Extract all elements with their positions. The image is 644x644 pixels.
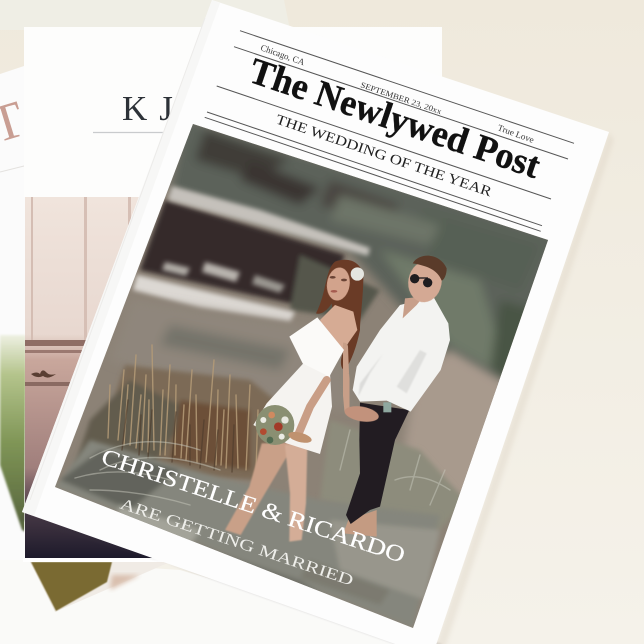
photo names text [102, 450, 404, 584]
foliage band [170, 118, 560, 395]
man head [408, 264, 442, 302]
bouquet [256, 405, 294, 445]
woman [225, 260, 364, 542]
woman legs [225, 443, 307, 542]
man feet [343, 510, 377, 537]
couple [225, 256, 450, 542]
newspaper title: The Newlywed Post [244, 51, 546, 187]
white dress top [289, 317, 344, 377]
panel: far-left magazine [0, 64, 60, 644]
headline: THE WEDDING OF THE YEAR [274, 113, 494, 201]
man neck and chest [402, 298, 420, 318]
woman arm to hands [344, 347, 348, 410]
woman hair [316, 260, 363, 371]
ornament [31, 370, 56, 378]
panel: top-left backdrop [0, 0, 290, 74]
panel: middle magazine [23, 27, 442, 562]
shadow under main book [20, 512, 442, 644]
masthead date: SEPTEMBER 23, 20xx [359, 80, 443, 116]
watch [383, 402, 391, 412]
cover photo [40, 110, 560, 640]
sunglasses [410, 274, 432, 287]
white dress skirt [253, 363, 332, 454]
foreground grass mass [70, 365, 465, 530]
sand midground [163, 298, 502, 498]
panel: bottom page [0, 560, 432, 644]
woman shoulders [320, 305, 357, 350]
far-left magazine photo [0, 335, 26, 532]
photo names text: CHRISTELLE & RICARDO [98, 444, 408, 568]
woman hand [288, 432, 312, 443]
white reflection bands [133, 186, 370, 322]
water [140, 200, 380, 320]
masthead tagline: True Love [496, 122, 535, 145]
masthead rules [205, 31, 574, 231]
hair flower [351, 267, 364, 281]
woman near arm [297, 380, 327, 437]
man trousers [346, 403, 409, 524]
man hands [344, 406, 379, 422]
masthead location: Chicago, CA [259, 42, 306, 67]
grass blades [75, 345, 450, 505]
book spine pages [22, 0, 220, 516]
bottom photo fragment [30, 562, 170, 612]
man hair [413, 256, 447, 281]
photo base [40, 110, 560, 640]
woman eyes and lips [330, 276, 347, 293]
man [343, 256, 450, 537]
beach sand foreground [55, 440, 440, 628]
photo names text: ARE GETTING MARRIED [118, 496, 355, 590]
middle magazine interior photo [25, 197, 175, 558]
middle magazine initials: KJ [122, 89, 185, 128]
woman face [326, 267, 350, 301]
man shirt [353, 297, 450, 412]
